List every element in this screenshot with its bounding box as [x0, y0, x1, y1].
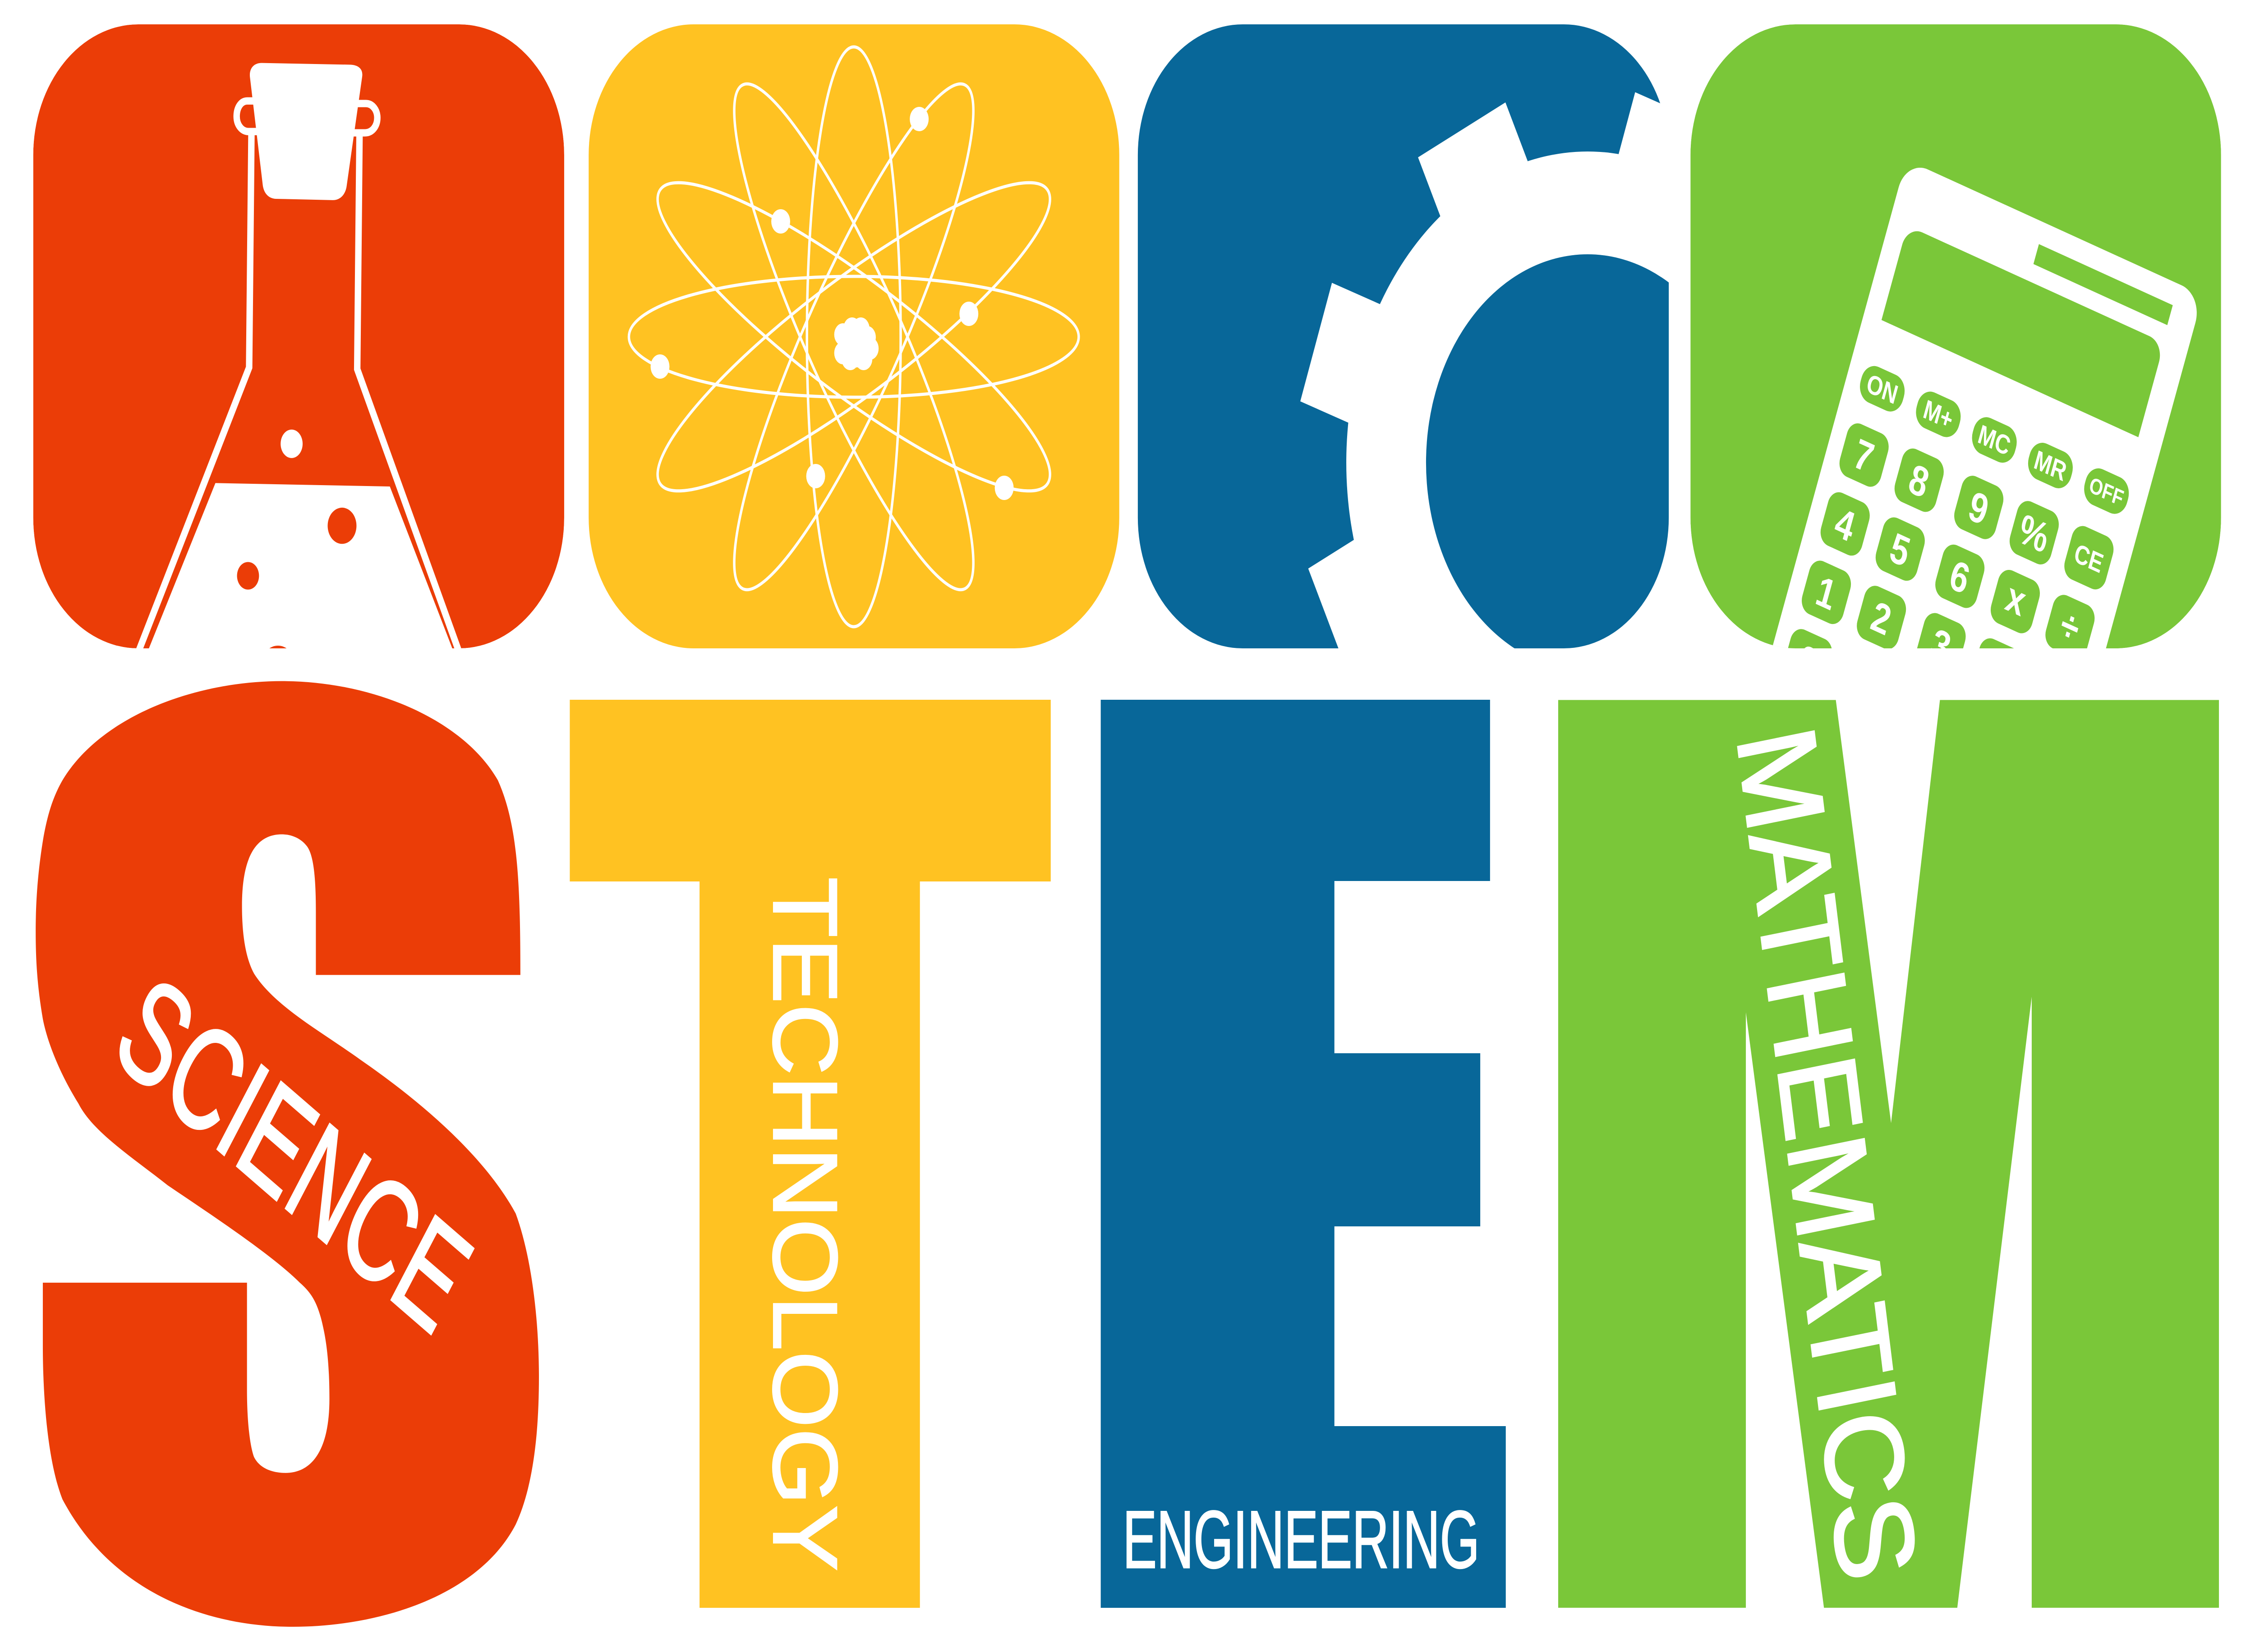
icon: calculator: 9 [1964, 482, 1993, 534]
icon: calculator: 8 [1904, 454, 1934, 507]
icon: calculator: ON [1864, 368, 1901, 410]
icon: conical flask [137, 63, 460, 670]
icon: calculator: % [2014, 505, 2054, 562]
icon: calculator: M+ [1920, 394, 1956, 436]
panel: mathematics tile with calculator icon [1690, 24, 2221, 648]
icon: calculator: 1 [1811, 567, 1841, 620]
icon: calculator: 5 [1885, 523, 1915, 576]
icon: gear [1300, 92, 1875, 833]
letter S with SCIENCE label [36, 681, 539, 1627]
icon: calculator: ÷ [2055, 600, 2085, 652]
icon: calculator: CE [2071, 538, 2106, 579]
icon: calculator: 4 [1830, 498, 1860, 551]
icon: calculator: x [2001, 573, 2031, 625]
icon: calculator: OFF [2087, 472, 2126, 511]
icon: atom [629, 47, 1079, 627]
icon: calculator: 2 [1867, 592, 1896, 644]
icon: calculator: 3 [1926, 619, 1956, 672]
panel: engineering tile with gear icon [1138, 24, 1875, 833]
letter T with TECHNOLOGY label [570, 700, 1051, 1608]
icon: calculator: MR [2031, 445, 2070, 487]
letter M with MATHEMATICS label [1558, 700, 2219, 1608]
icon: calculator: 7 [1849, 430, 1878, 482]
panel: technology tile with atom icon [589, 24, 1119, 648]
letter E with ENGINEERING label [1101, 700, 1506, 1608]
panel: science tile with flask icon [33, 24, 564, 670]
icon: calculator [1773, 168, 2197, 648]
text: SCIENCE: SCIENCE [96, 945, 492, 1363]
icon: calculator: 6 [1945, 551, 1974, 603]
text: ENGINEERING: ENGINEERING [1123, 1494, 1480, 1585]
icon: calculator: 0 [1793, 635, 1822, 688]
icon: calculator: MC [1975, 419, 2014, 462]
